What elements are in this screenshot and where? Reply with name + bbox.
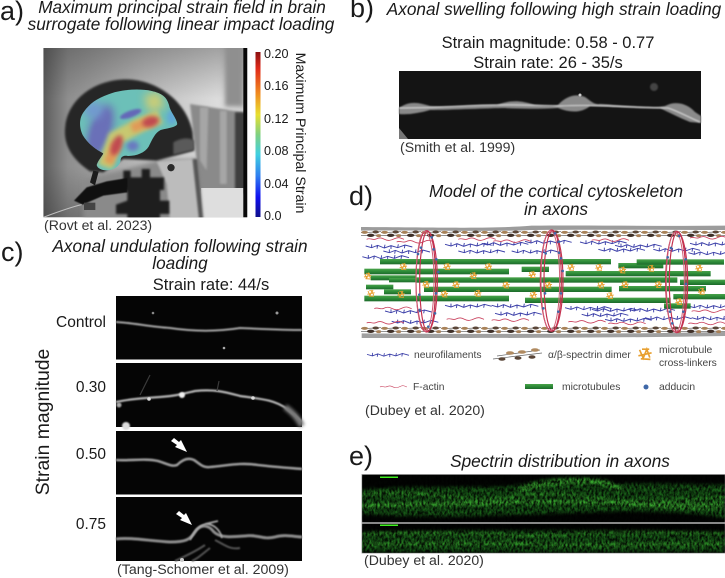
title c: Axonal undulation following strain: [51, 236, 308, 256]
strain overlay: [80, 90, 178, 170]
arrow: 0.50: [171, 438, 187, 452]
neurofilaments: [362, 240, 725, 324]
legend: adducin: [644, 382, 695, 393]
x-ray backdrop: [43, 37, 247, 221]
micrograph b: [399, 71, 701, 139]
citation b: (Smith et al. 1999): [400, 139, 515, 155]
colorbar: Maximum Principal Strain: [292, 53, 308, 213]
panel label e: e): [349, 441, 373, 471]
panel: c axonal undulation: [1, 236, 308, 578]
panel label c: c): [1, 237, 24, 267]
axon diagram: [361, 225, 725, 338]
legend: F-actin: [380, 382, 445, 393]
colorbar: 0.16: [264, 79, 289, 93]
title d: [429, 181, 683, 219]
panel label d: d): [349, 181, 373, 211]
title c: loading: [152, 253, 208, 273]
colorbar: 0.20: [264, 47, 289, 61]
title c: [51, 236, 308, 273]
x-ray image with strain overlay: [43, 37, 247, 221]
spectrin rows: [361, 230, 725, 334]
legend: microtubules: microtubules: [562, 382, 620, 393]
row labels: Control: [56, 314, 106, 331]
title e: Spectrin distribution in axons: [450, 451, 670, 471]
strain values b: Strain rate: 26 - 35/s: [473, 54, 623, 72]
arrow: 0.75: [176, 511, 192, 525]
colorbar: 0.12: [264, 112, 289, 126]
axis label: strain magnitude: Strain magnitude: [32, 349, 54, 495]
micrograph: control: [116, 296, 302, 360]
legend: cross-linkers: microtubule: [659, 345, 712, 356]
legend: neurofilaments: neurofilaments: [414, 350, 482, 361]
scale bar top: [380, 476, 398, 478]
title d: in axons: [524, 199, 588, 219]
panel: d cytoskeleton model: [349, 181, 725, 418]
strain rate c: Strain rate: 44/s: [153, 276, 269, 294]
row labels: [56, 314, 106, 533]
membrane: [361, 225, 725, 338]
title a: surrogate following linear impact loading: [28, 14, 335, 34]
legend: F-actin: F-actin: [413, 382, 445, 393]
legend: spectrin dimer: α/β-spectrin dimer: [548, 350, 631, 361]
citation c: (Tang-Schomer et al. 2009): [117, 562, 289, 578]
micrograph e bottom: [362, 524, 725, 553]
title d: Model of the cortical cytoskeleton: [429, 181, 683, 201]
micrograph: 0.75 with arrow: [116, 497, 302, 562]
panel: b axonal swelling: [350, 0, 722, 155]
scale bar bottom: [380, 524, 398, 526]
micrograph: 0.50 with arrow: [116, 431, 302, 494]
legend: spectrin dimer: [493, 348, 631, 361]
strain values b: Strain magnitude: 0.58 - 0.77: [442, 34, 654, 52]
citation e: (Dubey et al. 2020): [364, 552, 484, 568]
panel: e spectrin distribution: [349, 441, 725, 568]
micrograph: 0.30: [116, 363, 302, 430]
actin rings: [416, 230, 688, 333]
legend: cross-linkers: cross-linkers: [659, 358, 717, 369]
F-actin: [367, 236, 725, 325]
colorbar: 0.08: [264, 144, 289, 158]
citation d: (Dubey et al. 2020): [365, 402, 485, 418]
title a: [28, 0, 335, 34]
row labels: 0.75: [76, 516, 106, 533]
legend: microtubules: [525, 382, 620, 393]
legend: cross-linkers: [638, 345, 717, 369]
row labels: 0.50: [76, 446, 106, 463]
cross-linkers: [364, 264, 705, 305]
microtubules: [364, 259, 725, 309]
micrograph e top: [362, 474, 725, 522]
legend: adducin: adducin: [659, 382, 695, 393]
legend d: [367, 345, 717, 393]
colorbar: 0.04: [264, 177, 289, 191]
legend: neurofilaments: [367, 350, 482, 361]
row labels: 0.30: [76, 379, 106, 396]
colorbar: [256, 47, 308, 223]
adducin dots: [417, 232, 687, 328]
colorbar: 0.0: [264, 209, 282, 223]
panel: a strain field: [0, 0, 335, 233]
citation a: (Rovt et al. 2023): [44, 217, 152, 233]
strain values b: [442, 34, 654, 72]
